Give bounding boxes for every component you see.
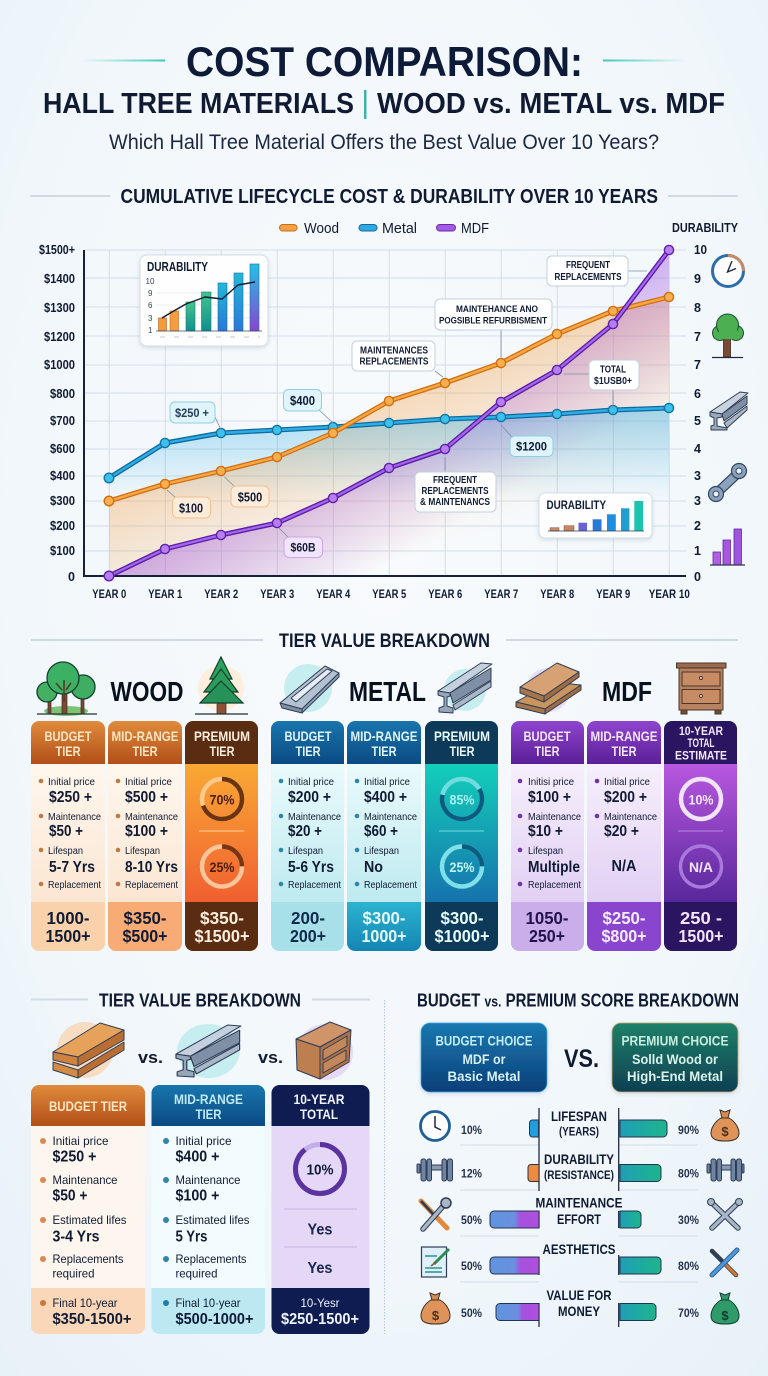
icon: dumbbell right: [707, 1159, 744, 1181]
callout: frequent replacements and maintenance: [415, 457, 496, 512]
callout: maintenance replacements: MAINTENANCES: [360, 346, 428, 356]
x axis labels: YEAR 6: [428, 587, 463, 601]
panel: wood premium tier: 70%: [210, 792, 235, 808]
icon: money bag green right: $: [721, 1308, 729, 1323]
score row: maintenance effort: EFFORT: [557, 1211, 601, 1227]
heading: wood: WOOD: [110, 676, 184, 707]
score row: durability: [461, 1151, 699, 1182]
icon: metal rail: [280, 664, 339, 713]
left axis labels: $1200: [44, 330, 75, 344]
box: budget choice: BUDGET CHOICE: [436, 1034, 532, 1049]
panel: mdf budget tier: TIER: [534, 743, 560, 759]
panel: budget tier (lower): [31, 1085, 145, 1334]
panel: metal mid-range tier: 1000+: [362, 926, 406, 946]
panel: wood budget tier: Initial price: [48, 776, 95, 788]
panel: metal mid-range tier: Initial price: [364, 776, 410, 788]
text: vs.: vs.: [258, 1048, 283, 1067]
panel: mdf budget tier: Initisi price: [528, 776, 574, 788]
panel: mdf mid-range tier: [587, 721, 661, 951]
x axis labels: YEAR 3: [260, 587, 295, 601]
score row: maintenance effort: [461, 1195, 699, 1228]
chart legend: Wood: [304, 221, 339, 237]
heading: tier value breakdown (lower left): TIER VALUE BREAKDOWN: [99, 990, 301, 1011]
panel: 10-year total (lower): Yes: [308, 1260, 333, 1277]
inset: durability bars lower: DURABILITY: [546, 498, 606, 512]
x axis labels: YEAR 5: [372, 587, 407, 601]
panel: metal budget tier: 200+: [290, 926, 326, 946]
callout: frequent replacements and maintenance: FREQUENT: [433, 475, 477, 486]
score row: durability: 12%: [461, 1167, 482, 1181]
icon: money bag orange left: [421, 1293, 450, 1324]
panel: mdf budget tier: Multiple: [528, 859, 580, 876]
inset: durability bars top: 10: [146, 277, 155, 286]
line chart: cumulative lifecycle cost: [39, 221, 739, 601]
panel: wood mid-range tier: $500 +: [125, 789, 168, 806]
x axis labels: YEAR 9: [596, 587, 631, 601]
panel: mdf mid-range tier: Maintenance: [604, 811, 657, 823]
left axis labels: $1500+: [39, 243, 75, 257]
callout: frequent replacements and maintenance: REPLACEMENTS: [422, 486, 489, 497]
text: vs.: vs.: [138, 1048, 163, 1067]
panel: metal budget tier: BUDGET: [284, 728, 332, 744]
panel: 10-year total (lower): 10%: [306, 1162, 334, 1178]
icon: document with pen: [422, 1247, 449, 1277]
wood line: [104, 292, 674, 506]
score row: value for money: 70%: [678, 1306, 699, 1320]
icon: mdf boards: [516, 663, 581, 714]
box: budget choice: [421, 1023, 547, 1092]
callout: maintenance and refurbishment: MAINTEHANCE ANO: [456, 304, 538, 315]
panel: wood premium tier: $350-: [200, 908, 244, 928]
panel: metal budget tier: Replacement: [288, 879, 341, 891]
panel: mdf budget tier: 1050-: [526, 908, 569, 928]
metal line: [104, 403, 674, 483]
panel: mid-range tier (lower): Estimated lifes: [176, 1213, 250, 1227]
left axis labels: $400: [50, 469, 75, 483]
panel: metal budget tier: Initial price: [288, 776, 334, 788]
panel: budget tier (lower): $350-1500+: [52, 1311, 132, 1328]
right axis labels: durability: 8: [694, 301, 701, 315]
callout: total: TOTAL: [600, 365, 626, 376]
panel: mdf mid-range tier: $800+: [602, 926, 646, 946]
score row: value for money: 50%: [461, 1306, 482, 1320]
panel: mid-range tier (lower): Replacements: [176, 1252, 246, 1266]
panel: metal budget tier: $20 +: [288, 823, 322, 840]
right axis labels: durability: 4: [694, 442, 701, 456]
x axis labels: YEAR 1: [148, 587, 183, 601]
panel: metal budget tier: 5-6 Yrs: [288, 859, 334, 876]
right axis labels: durability: 7: [694, 358, 701, 372]
panel: mdf 10-year total estimate: TOTAL: [688, 736, 714, 750]
panel: wood budget tier: [31, 721, 105, 951]
score row: durability: DURABILITY: [544, 1151, 615, 1167]
icon: wood cabinet: [296, 1022, 353, 1080]
title block: WOOD vs. METAL vs. MDF: [377, 88, 725, 120]
callout: maintenance replacements: REPLACEMENTS: [360, 357, 429, 368]
icon: mdf nightstand: [676, 663, 726, 714]
panel: mid-range tier (lower): $400 +: [176, 1149, 220, 1166]
panel: 10-year total (lower): Yes: [308, 1222, 333, 1239]
callout: $1200: $1200: [516, 440, 547, 454]
panel: metal budget tier: TIER: [296, 743, 320, 759]
right axis labels: durability: 0: [694, 570, 701, 584]
box: budget choice: MDF or: [462, 1052, 506, 1067]
left axis labels: [39, 243, 75, 584]
panel: metal mid-range tier: $60 +: [364, 823, 398, 840]
panel: metal budget tier: Maintenance: [288, 811, 341, 823]
icon: tree (durability axis): [712, 314, 744, 358]
x axis labels: YEAR 0: [92, 587, 127, 601]
score row: lifespan: LIFESPAN: [551, 1108, 607, 1124]
panel: mdf budget tier: [511, 721, 584, 951]
left axis labels: $300: [50, 494, 75, 508]
panel: wood mid-range tier: MID-RANGE: [112, 728, 178, 744]
title block: [43, 38, 725, 154]
panel: mid-range tier (lower): Initial price: [176, 1134, 232, 1148]
panel: metal premium tier: [425, 721, 498, 951]
left axis labels: $1300: [44, 301, 75, 315]
panel: wood budget tier: Replacement: [48, 879, 101, 891]
icon: clock (lifespan): [420, 1112, 450, 1140]
x axis labels: YEAR 2: [204, 587, 239, 601]
panel: 10-year total (lower): 10-Yesr: [300, 1296, 340, 1310]
panel: mdf 10-year total estimate: 250 -: [680, 908, 722, 928]
icon: pine tree: [195, 657, 248, 714]
panel: metal budget tier: Lifespan: [288, 845, 323, 857]
x axis labels: [92, 587, 690, 601]
icon: bar chart (durability axis): [710, 529, 745, 565]
panel: mid-range tier (lower): TIER: [196, 1106, 222, 1122]
callout: $250 +: $250 +: [175, 406, 209, 420]
left axis labels: $800: [50, 387, 75, 401]
panel: mdf budget tier: Maintenance: [528, 811, 581, 823]
icon: money bag orange right: [711, 1110, 739, 1141]
icon: crossed wrenches right: [708, 1198, 742, 1228]
panel: budget tier (lower): $50 +: [52, 1188, 88, 1205]
mdf line: [104, 245, 674, 581]
chart heading: CUMULATIVE LIFECYCLE COST & DURABILITY OVER 10 YEARS: [120, 186, 658, 208]
icon: dumbbell left: [417, 1159, 452, 1181]
left axis labels: $600: [50, 442, 75, 456]
score row: lifespan: [461, 1108, 699, 1139]
callout: frequent replacements: [547, 256, 647, 286]
inset: durability bars lower: [539, 493, 652, 538]
callout: frequent replacements: REPLACEMENTS: [554, 272, 622, 283]
left axis labels: $100: [50, 544, 75, 558]
left axis labels: $700: [50, 414, 75, 428]
icon: wrench (durability axis): [708, 464, 746, 502]
panel: 10-year total (lower): $250-1500+: [281, 1311, 359, 1328]
callout: $250 +: [170, 402, 221, 430]
score row: lifespan: (YEARS): [559, 1125, 599, 1139]
callout: maintenance and refurbishment: POGSIBLE REFURBISMENT: [439, 316, 547, 326]
right axis labels: durability: 1: [694, 544, 701, 558]
box: premium choice: Solld Wood or: [632, 1052, 719, 1067]
panel: metal mid-range tier: TIER: [372, 743, 396, 759]
panel: metal premium tier: $300-: [440, 908, 484, 928]
panel: mid-range tier (lower): Maintenance: [176, 1173, 241, 1187]
right axis labels: durability: DURABILITY: [672, 221, 739, 235]
box: premium choice: High-End Metal: [627, 1069, 723, 1084]
panel: wood budget tier: BUDGET: [44, 728, 92, 744]
panel: metal premium tier: 25%: [450, 859, 475, 875]
callout: $400: $400: [290, 394, 315, 408]
panel: 10-year total (lower): 10-YEAR: [294, 1091, 344, 1107]
callout: total: [564, 360, 639, 408]
panel: wood mid-range tier: $100 +: [125, 823, 168, 840]
score chart: [460, 1108, 699, 1327]
panel: metal mid-range tier: Lifespan: [364, 845, 399, 857]
title: COST COMPARISON:: [186, 38, 583, 85]
panel: mdf budget tier: $10 +: [528, 823, 563, 840]
panel: budget tier (lower): 3-4 Yrs: [52, 1229, 100, 1246]
panel: metal mid-range tier: No: [364, 859, 383, 876]
panel: wood budget tier: 1000-: [46, 908, 90, 928]
score row: maintenance effort: 30%: [678, 1213, 699, 1227]
score row: value for money: VALUE FOR: [546, 1287, 612, 1303]
icon: steel beam (durability axis): [710, 392, 748, 430]
area fills under lines: [109, 250, 669, 576]
x axis labels: YEAR 7: [484, 587, 519, 601]
axes: [84, 250, 686, 576]
text: vs: VS.: [564, 1045, 599, 1073]
panel: mdf 10-year total estimate: 1500+: [678, 926, 724, 946]
panel: metal mid-range tier: [347, 721, 421, 951]
panel: mdf mid-range tier: TIER: [612, 743, 636, 759]
callout: $60B: $60B: [290, 540, 316, 554]
panel: wood mid-range tier: Maintenance: [125, 811, 178, 823]
panel: mid-range tier (lower): 5 Yrs: [176, 1229, 208, 1246]
box: budget choice: Basic Metal: [448, 1069, 520, 1084]
box: premium choice: PREMIUM CHOICE: [622, 1034, 728, 1049]
callout: $500: $500: [238, 490, 262, 504]
panel: metal premium tier: $1000+: [434, 926, 490, 946]
score row: durability: 80%: [678, 1167, 699, 1181]
inset: durability bars top: 6: [148, 301, 153, 310]
chart legend: Metal: [382, 221, 417, 237]
panel: mdf mid-range tier: $200 +: [604, 789, 647, 806]
icon: steel i-beam: [176, 1024, 241, 1078]
inset: durability bars top: 1: [148, 326, 153, 335]
panel: wood premium tier: $1500+: [194, 926, 250, 946]
right axis labels: durability: 3: [694, 469, 701, 483]
x axis labels: YEAR 4: [316, 587, 351, 601]
section heading: tier value breakdown: TIER VALUE BREAKDOWN: [279, 631, 490, 652]
question line: Which Hall Tree Material Offers the Best Value Over 10 Years?: [109, 131, 659, 154]
callout: $400: [284, 390, 333, 423]
icon: metal i-beam: [438, 663, 492, 713]
panel: budget tier (lower): Maintenance: [52, 1173, 118, 1187]
icon: wood planks: [53, 1022, 124, 1078]
panel: mdf mid-range tier: $20 +: [604, 823, 639, 840]
callout: $1200: [501, 425, 553, 456]
panel: wood budget tier: 1500+: [46, 926, 90, 946]
score row: maintenance effort: MAINTENANCE: [536, 1195, 622, 1211]
callout: $60B: [279, 528, 322, 558]
chart legend: [280, 221, 489, 237]
panel: wood mid-range tier: [108, 721, 182, 951]
panel: mdf budget tier: Lifespan: [528, 845, 563, 857]
panel: metal mid-range tier: $400 +: [364, 789, 407, 806]
panel: wood budget tier: 5-7 Yrs: [49, 859, 95, 876]
panel: mdf budget tier: BUDGET: [524, 728, 571, 744]
score row: durability: (RESISTANCE): [544, 1168, 614, 1182]
right axis labels: durability: 5: [694, 414, 701, 428]
icon: money bag orange left: $: [432, 1308, 440, 1323]
callout: total: $1USB0+: [594, 375, 632, 387]
panel: mdf mid-range tier: MID-RANGE: [590, 728, 658, 744]
score row: lifespan: 90%: [678, 1123, 699, 1137]
panel: metal mid-range tier: MID-RANGE: [350, 728, 418, 744]
score row: maintenance effort: 50%: [461, 1213, 482, 1227]
callout: $500: [224, 477, 269, 507]
panel: 10-year total (lower): [272, 1085, 370, 1334]
panel: mdf 10-year total estimate: 10%: [688, 792, 714, 808]
icon: money bag green right: [711, 1293, 739, 1324]
box: premium choice: [612, 1023, 738, 1092]
callout: frequent replacements: FREQUENT: [566, 260, 610, 271]
panel: wood mid-range tier: TIER: [132, 743, 158, 759]
left axis labels: 0: [68, 570, 75, 584]
panel: mid-range tier (lower): [152, 1085, 265, 1334]
panel: budget tier (lower): Estimated lifes: [52, 1213, 126, 1227]
icon: wood trees: [37, 662, 97, 716]
score row: aesthetics: AESTHETICS: [542, 1241, 616, 1257]
panel: wood mid-range tier: $500+: [122, 926, 168, 946]
callout: $100: [167, 490, 210, 518]
panel: wood mid-range tier: $350-: [124, 908, 167, 928]
panel: 10-year total (lower): TOTAL: [300, 1106, 338, 1122]
panel: mdf 10-year total estimate: 10-YEAR: [679, 724, 723, 738]
icon: clock (durability axis): [712, 256, 744, 286]
icon: tools left: [421, 1198, 451, 1229]
panel: mid-range tier (lower): required: [176, 1267, 218, 1281]
panel: wood mid-range tier: 8-10 Yrs: [125, 859, 178, 876]
right axis labels: durability: 10: [694, 243, 707, 257]
panel: metal mid-range tier: Maintenance: [364, 811, 417, 823]
right axis labels: durability: [672, 221, 739, 584]
callout: maintenance and refurbishment: [435, 299, 552, 357]
panel: wood mid-range tier: Lifespan: [125, 845, 160, 857]
panel: metal mid-range tier: Replacement: [364, 879, 417, 891]
panel: wood budget tier: $250 +: [49, 789, 92, 806]
panel: budget tier (lower): $250 +: [52, 1149, 96, 1166]
right axis labels: durability: 3: [694, 494, 701, 508]
panel: metal premium tier: TIER: [450, 743, 474, 759]
score row: aesthetics: 80%: [678, 1259, 699, 1273]
panel: budget tier (lower): BUDGET TIER: [49, 1098, 127, 1114]
right axis labels: durability: 6: [694, 387, 701, 401]
panel: wood mid-range tier: Replacement: [125, 879, 178, 891]
inset: durability bars top: 3: [148, 314, 153, 323]
icon: screwdriver and wrench right: [712, 1250, 737, 1275]
score row: aesthetics: [461, 1241, 699, 1274]
panel: wood premium tier: PREMIUM: [194, 728, 250, 744]
subtitle: HALL TREE MATERIALS: [43, 88, 354, 120]
heading: mdf: MDF: [602, 676, 652, 707]
panel: mdf 10-year total estimate: [664, 721, 737, 951]
callout: $100: $100: [179, 502, 203, 516]
score row: value for money: MONEY: [558, 1303, 601, 1319]
panel: wood mid-range tier: Initial price: [125, 776, 172, 788]
panel: mdf budget tier: 250+: [529, 926, 565, 946]
panel: mdf mid-range tier: Initial price: [604, 776, 650, 788]
panel: mid-range tier (lower): Final 10·year: [176, 1296, 241, 1310]
left axis labels: $200: [50, 519, 75, 533]
panel: mdf 10-year total estimate: N/A: [689, 859, 713, 875]
panel: mdf budget tier: $100 +: [528, 789, 571, 806]
inset: durability bars top: DURABILITY: [147, 260, 209, 274]
right axis labels: durability: 7: [694, 330, 701, 344]
right axis labels: durability: 9: [694, 272, 701, 286]
callout: frequent replacements and maintenance: & MAINTENANCS: [420, 497, 490, 508]
heading: metal: METAL: [349, 676, 426, 707]
panel: wood premium tier: TIER: [210, 743, 234, 759]
panel: metal mid-range tier: $300-: [362, 908, 406, 928]
panel: mdf mid-range tier: N/A: [612, 858, 637, 875]
panel: mdf 10-year total estimate: ESTIMATE: [675, 748, 727, 762]
x axis labels: YEAR 8: [540, 587, 575, 601]
panel: metal premium tier: PREMIUM: [434, 728, 490, 744]
chart gridlines: [84, 250, 686, 576]
left axis labels: $1400: [44, 272, 75, 286]
panel: metal budget tier: 200-: [291, 908, 325, 928]
score row: aesthetics: 50%: [461, 1259, 482, 1273]
icon: money bag orange right: $: [721, 1124, 729, 1139]
chart legend: MDF: [461, 221, 489, 237]
panel: wood budget tier: $50 +: [49, 823, 83, 840]
inset: durability bars top: 9: [148, 289, 153, 298]
panel: mid-range tier (lower): MID-RANGE: [174, 1091, 243, 1107]
callout: maintenance replacements: [352, 341, 443, 377]
panel: mdf mid-range tier: $250-: [602, 908, 646, 928]
panel: wood premium tier: 25%: [210, 859, 235, 875]
panel: metal budget tier: $200 +: [288, 789, 331, 806]
panel: budget tier (lower): Initiai price: [52, 1134, 109, 1148]
panel: wood budget tier: Lifespan: [48, 845, 83, 857]
x axis labels: YEAR 10: [649, 587, 690, 601]
score row: lifespan: 10%: [461, 1123, 482, 1137]
left axis labels: $1000: [44, 358, 75, 372]
inset: durability bars top: [140, 255, 268, 346]
panel: wood budget tier: TIER: [56, 743, 80, 759]
panel: wood premium tier: [185, 721, 258, 951]
panel: mid-range tier (lower): $500-1000+: [176, 1311, 254, 1328]
panel: metal premium tier: 85%: [450, 792, 475, 808]
panel: budget tier (lower): Replacements: [52, 1252, 124, 1266]
panel: budget tier (lower): required: [52, 1267, 94, 1281]
right axis labels: durability: 2: [694, 519, 701, 533]
score row: value for money: [461, 1287, 699, 1320]
panel: wood budget tier: Maintenance: [48, 811, 101, 823]
panel: mid-range tier (lower): $100 +: [176, 1188, 220, 1205]
panel: metal budget tier: [271, 721, 344, 951]
panel: budget tier (lower): Final 10-year: [52, 1296, 118, 1310]
panel: mdf budget tier: Replacement: [528, 879, 581, 891]
